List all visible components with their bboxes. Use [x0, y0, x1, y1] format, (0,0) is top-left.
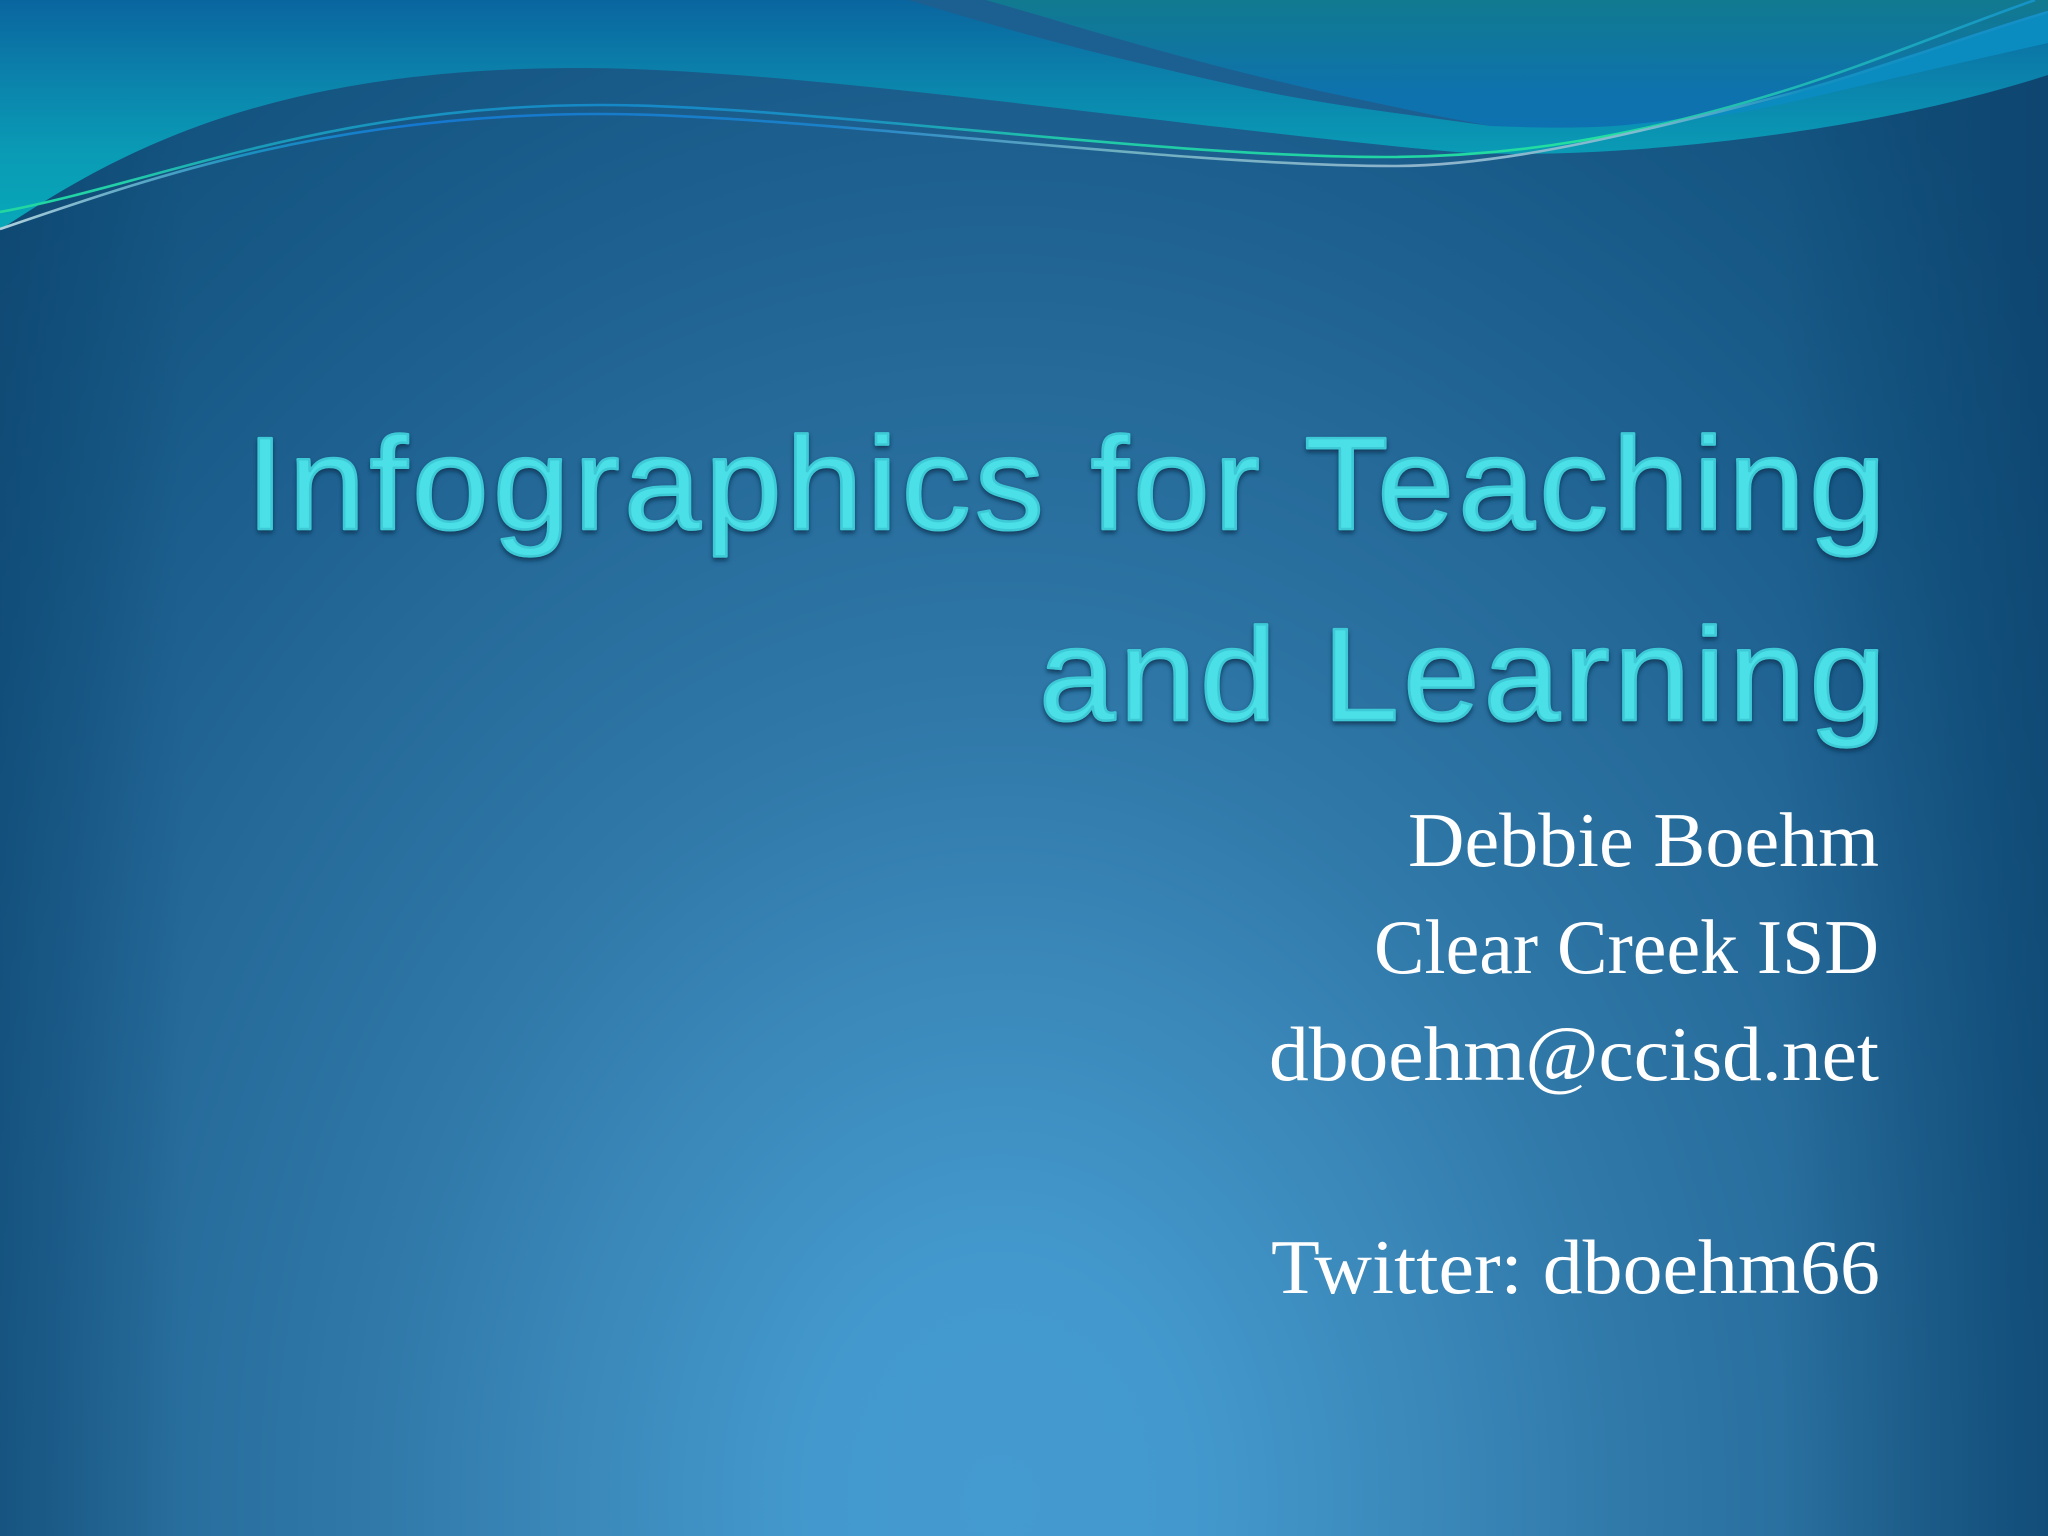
wave: bright blue sliver	[1450, 0, 2048, 127]
wave: top blue shape	[986, 0, 2048, 128]
header wave decoration	[0, 0, 2048, 230]
curve line: lower	[0, 12, 2048, 229]
title	[246, 410, 1890, 748]
presenter name: Debbie Boehm	[1408, 797, 1879, 883]
wave: dark band	[908, 0, 1600, 126]
wave: main teal band	[0, 0, 2048, 230]
title line 2: and Learning	[1039, 601, 1890, 748]
twitter handle: Twitter: dboehm66	[1271, 1224, 1880, 1310]
title line 1: Infographics for Teaching	[246, 410, 1890, 557]
organisation: Clear Creek ISD	[1374, 904, 1879, 990]
email: dboehm@ccisd.net	[1269, 1011, 1879, 1097]
curve line: upper	[0, 0, 2035, 212]
presenter details	[1269, 797, 1880, 1310]
